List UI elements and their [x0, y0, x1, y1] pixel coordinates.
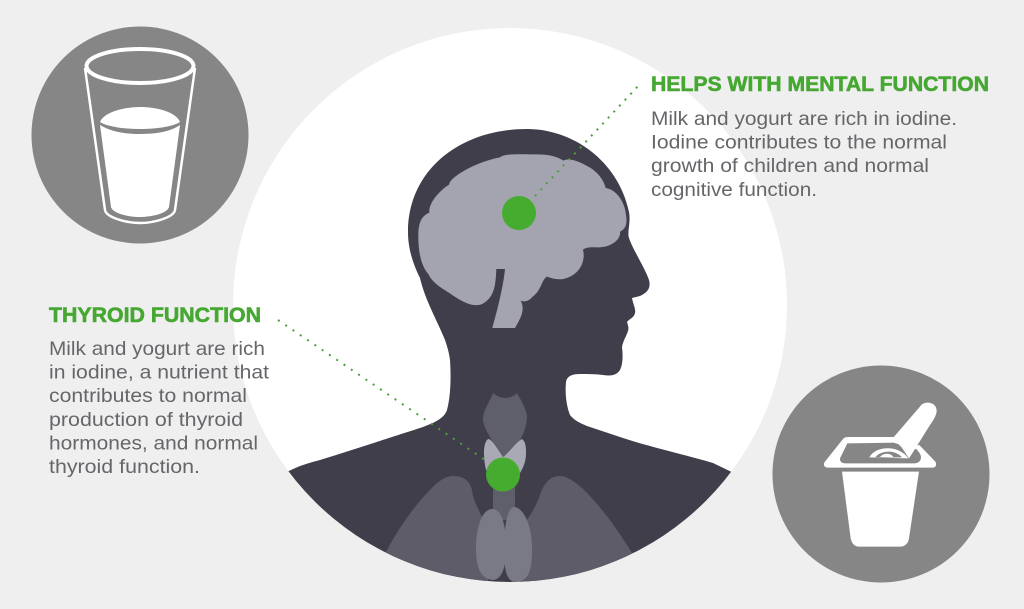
thyroid and organs: [386, 393, 632, 582]
icon: glass of milk: [32, 26, 248, 244]
icon: yogurt pot: [772, 366, 990, 582]
body copy: Milk and yogurt are rich: [49, 338, 265, 360]
bronchi: [476, 509, 506, 580]
larynx: [483, 393, 527, 457]
body copy: Iodine contributes to the normal: [651, 132, 947, 154]
body copy: [651, 108, 957, 201]
left lung: [386, 476, 488, 581]
right lung: [522, 476, 632, 582]
dotted leader: brain: [535, 84, 640, 196]
dotted leader: thyroid: [278, 320, 488, 462]
body copy: [49, 338, 270, 478]
marker: brain: [502, 196, 536, 230]
body copy: growth of children and normal: [651, 155, 929, 177]
body copy: contributes to normal: [49, 385, 247, 407]
thyroid lobes: [484, 439, 526, 473]
body copy: Milk and yogurt are rich in iodine.: [651, 108, 957, 130]
heading: HELPS WITH MENTAL FUNCTION: [651, 73, 989, 96]
body copy: production of thyroid: [49, 409, 243, 431]
heading: THYROID FUNCTION: [49, 304, 261, 327]
marker: thyroid: [486, 458, 520, 492]
head and shoulders silhouette: [280, 129, 740, 600]
trachea: [493, 486, 515, 520]
brain: [418, 154, 627, 328]
body copy: cognitive function.: [651, 179, 817, 201]
body copy: in iodine, a nutrient that: [49, 362, 270, 384]
text block: mental function: [651, 73, 989, 201]
panel: central white circle with head silhouette: [233, 28, 787, 600]
body copy: hormones, and normal: [49, 432, 258, 454]
body copy: thyroid function.: [49, 456, 200, 478]
text block: thyroid function: [49, 304, 270, 478]
